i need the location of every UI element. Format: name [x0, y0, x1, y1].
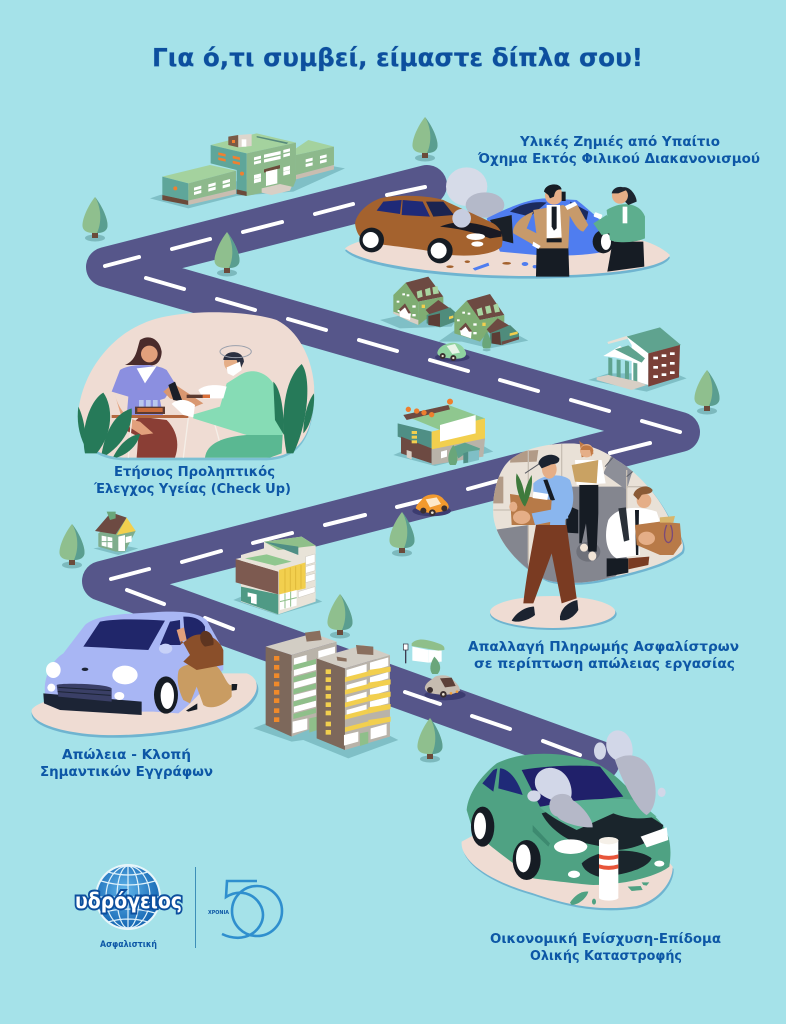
man on phone — [513, 184, 588, 277]
building: hospital — [150, 133, 345, 208]
platform — [32, 673, 258, 738]
logo: Ydrogeios — [75, 864, 182, 950]
smoke — [446, 167, 504, 218]
tree left of hospital — [82, 197, 108, 242]
doctor — [172, 346, 283, 458]
label: lost documents — [40, 747, 213, 780]
panel: job loss scene — [490, 440, 690, 630]
bank building — [588, 327, 687, 392]
icon: globe — [95, 864, 161, 930]
patient woman — [112, 337, 203, 458]
tree top right — [412, 117, 438, 162]
kneeling person — [177, 627, 237, 712]
woman with phone — [593, 187, 645, 272]
bus stop and grey car — [403, 639, 466, 700]
houses and green car — [380, 277, 528, 362]
label: check up: Έλεγχος Υγείας (Check Up) — [93, 481, 291, 497]
blob shadow — [495, 445, 685, 585]
tree lower road — [417, 718, 443, 762]
shop with billboard and yellow car — [393, 399, 493, 516]
panel: stolen documents scene — [32, 612, 258, 738]
modern building centre — [233, 537, 322, 615]
label: lost documents: Απώλεια - Κλοπή — [62, 747, 191, 763]
label: total loss: Ολικής Καταστροφής — [530, 948, 682, 964]
woman with box, background — [572, 440, 606, 562]
blue car — [487, 198, 614, 256]
platform — [462, 830, 674, 910]
label: premium waiver: σε περίπτωση απώλειας εργασίας — [474, 656, 735, 672]
label: total loss — [490, 931, 721, 964]
tree centre — [389, 512, 415, 556]
panel: check up scene — [78, 312, 314, 460]
tree near apartments — [327, 594, 353, 638]
debris — [570, 882, 649, 905]
road — [102, 185, 680, 761]
title: Για ό,τι συμβεί, είμαστε δίπλα σου! — [152, 43, 643, 72]
divider and 50 years badge — [195, 867, 282, 948]
blob background — [78, 312, 314, 460]
smoke — [527, 730, 666, 827]
panel: crash scene, material damage — [345, 167, 670, 279]
brand name: υδρόγειος — [75, 889, 182, 913]
label: material damage: Όχημα Εκτός Φιλικού Διακανονισμού — [477, 151, 760, 167]
tree left second bend — [59, 524, 85, 568]
man carrying box and plant — [509, 455, 578, 622]
tree right of bank — [694, 370, 720, 414]
seated man with box — [606, 486, 682, 577]
label: check up — [93, 464, 291, 497]
leaves left — [78, 393, 140, 458]
table and test tubes — [112, 400, 220, 458]
platform — [345, 232, 670, 279]
label: material damage — [477, 134, 760, 167]
tree on road bend — [214, 232, 240, 276]
label: premium waiver — [468, 639, 739, 672]
label: material damage: Υλικές Ζημιές από Υπαίτιο — [519, 134, 720, 150]
brown car — [355, 196, 503, 263]
label: total loss: Οικονομική Ενίσχυση-Επίδομα — [490, 931, 721, 947]
debris — [446, 260, 537, 271]
label: lost documents: Σημαντικών Εγγράφων — [40, 764, 213, 780]
50 mark — [222, 881, 282, 938]
small house — [93, 512, 138, 555]
green car — [467, 754, 670, 885]
blue car — [43, 612, 223, 715]
tagline: Ασφαλιστική — [100, 940, 157, 950]
label: premium waiver: Απαλλαγή Πληρωμής Ασφαλίστρων — [468, 639, 739, 655]
bollard — [599, 837, 618, 901]
apartment blocks — [253, 631, 398, 758]
label: check up: Ετήσιος Προληπτικός — [114, 464, 275, 480]
panel: total loss scene — [462, 730, 674, 910]
leaves right — [273, 364, 314, 453]
years text: ΧΡΟΝΙΑ — [208, 910, 230, 916]
office interior — [490, 440, 690, 587]
platform under man — [490, 596, 617, 630]
